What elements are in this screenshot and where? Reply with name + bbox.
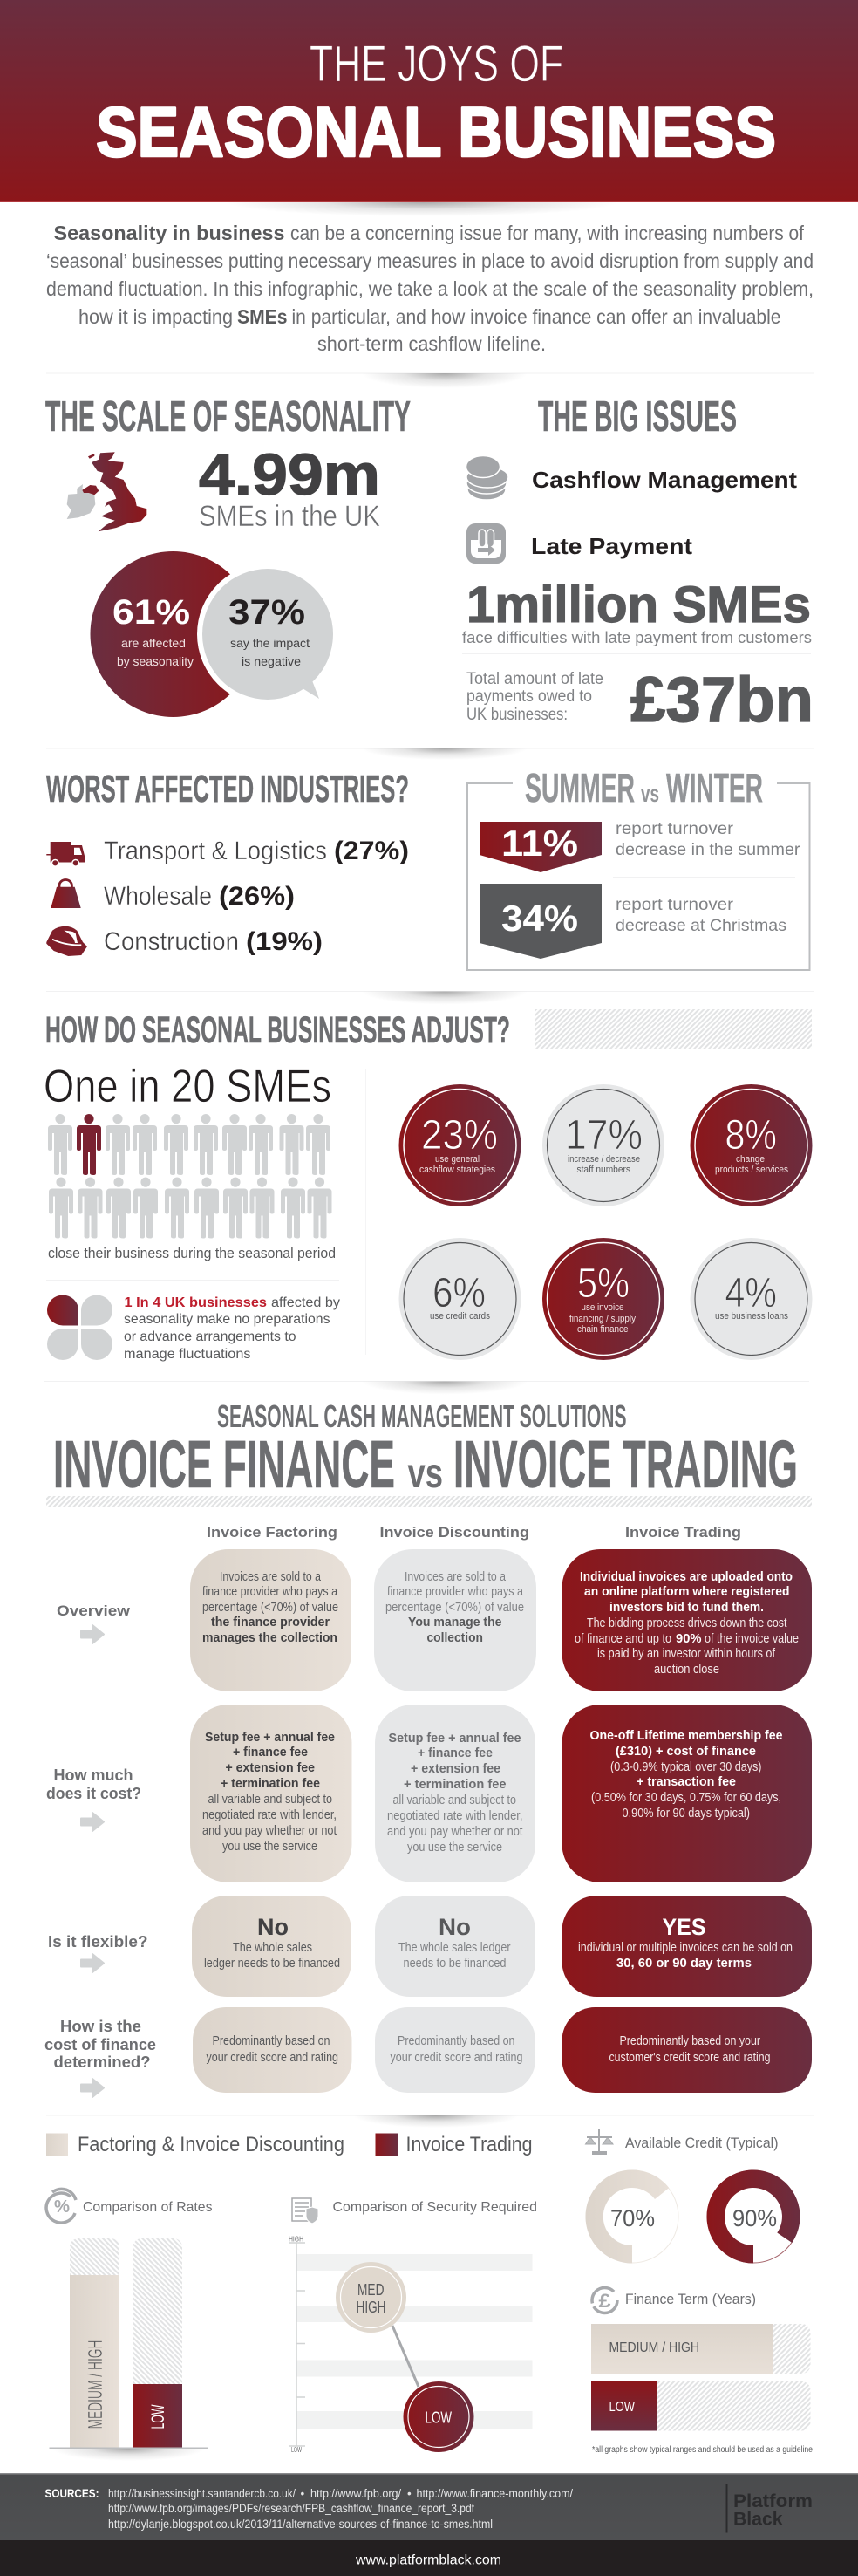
- text: one in four businesses: or advance arrangements to: [124, 1329, 296, 1344]
- stat circle: 5 percent: chain finance: [577, 1324, 628, 1335]
- text: total amount owed: [466, 670, 603, 724]
- card: factoring cost: [190, 1705, 352, 1882]
- text: summer turnover: report turnover: [616, 820, 734, 838]
- card: trading overview: is paid by an investor within hours of: [597, 1647, 776, 1661]
- chart: 90 percent donut: 90%: [732, 2205, 777, 2231]
- sources links: http://businessinsight.santandercb.co.uk/: [108, 2487, 296, 2500]
- stat: 37bn: £37bn: [630, 665, 814, 735]
- text: one in four businesses: seasonality make no preparations: [124, 1312, 330, 1327]
- stat label: late payment difficulties: face difficulties with late payment from customers: [462, 628, 812, 646]
- card: trading cost: (0.3-0.9% typical over 30 days): [610, 1760, 762, 1774]
- chart: overlapping circles: by seasonality: [117, 654, 194, 668]
- item: wholesale: Wholesale: [104, 882, 212, 911]
- intro paragraph: short-term cashflow lifeline.: [317, 332, 546, 355]
- card: factoring cost: + termination fee: [221, 1777, 320, 1791]
- stat circle: 8 percent: change: [736, 1154, 765, 1165]
- card: discounting overview: [374, 1549, 536, 1691]
- bar: low: [591, 2381, 811, 2430]
- chart: overlapping circles: is negative: [242, 654, 301, 668]
- card: trading overview: 90%: [676, 1632, 702, 1646]
- chart: 90 percent donut: [707, 2170, 800, 2263]
- title line two: SEASONAL BUSINESS: [96, 93, 776, 172]
- chart: 70 percent donut: [586, 2170, 678, 2263]
- logo: platform black: Black: [733, 2509, 783, 2530]
- chart: rates bars: MEDIUM / HIGH: [84, 2340, 106, 2429]
- row label: is it flexible: [48, 1933, 148, 1972]
- sources label: SOURCES:: [45, 2487, 99, 2500]
- card: discounting cost: + extension fee: [411, 1762, 500, 1776]
- icon: bag: [51, 879, 81, 908]
- text: total amount owed: Total amount of late: [466, 670, 603, 688]
- stat circle: 8 percent: [691, 1084, 813, 1206]
- stat circle: 5 percent: use invoice: [581, 1302, 624, 1313]
- issue: cashflow management: Cashflow Management: [532, 467, 797, 493]
- card: trading overview: investors bid to fund them.: [609, 1601, 764, 1615]
- card: factoring flexibility: The whole sales: [233, 1941, 312, 1955]
- sources links: •: [407, 2487, 412, 2500]
- icon: late payment: [466, 523, 506, 564]
- legend: Invoice Trading: [406, 2133, 532, 2156]
- heading: how do seasonal businesses adjust: HOW DO SEASONAL BUSINESSES ADJUST?: [45, 1009, 510, 1051]
- panel: the big issues: [462, 393, 814, 735]
- footer: website: www.platformblack.com: [355, 2552, 501, 2568]
- sources links: http://www.finance-monthly.com/: [417, 2487, 573, 2500]
- logo: platform black: [725, 2484, 813, 2533]
- card: factoring overview: manages the collection: [202, 1631, 337, 1645]
- chart: overlapping circles: [91, 551, 338, 717]
- panel: available credit: [586, 2129, 800, 2263]
- card: trading determination: Predominantly based on your: [619, 2034, 760, 2048]
- heading: comparison of rates: Comparison of Rates: [83, 2200, 213, 2215]
- card: discounting cost: + finance fee: [418, 1746, 493, 1760]
- card: discounting overview: percentage (<70%) of value: [385, 1601, 524, 1615]
- card: discounting overview: Invoices are sold to a: [405, 1570, 507, 1584]
- card: discounting flexibility: needs to be financed: [403, 1957, 506, 1971]
- card: trading determination: [562, 2007, 812, 2093]
- row label: how is the cost of finance determined: [44, 2018, 156, 2097]
- chart: rates bars: LOW: [148, 2404, 168, 2429]
- text: total amount owed: UK businesses:: [466, 706, 568, 724]
- card: trading overview: of finance and up to: [575, 1632, 671, 1646]
- card: factoring cost: + extension fee: [225, 1761, 315, 1775]
- stat circle: 23 percent: 23%: [421, 1112, 498, 1158]
- text: one in four businesses: manage fluctuations: [124, 1347, 251, 1362]
- card: factoring determination: [193, 2007, 352, 2093]
- stat circle: 4 percent: use business loans: [715, 1311, 788, 1322]
- badge: 34 percent: 34%: [501, 898, 578, 939]
- intro paragraph: [46, 222, 814, 355]
- icon: hard hat: [46, 926, 87, 956]
- stat circle: 17 percent: [542, 1084, 664, 1206]
- icon: truck: [46, 842, 85, 866]
- heading: summer vs winter: vs: [641, 780, 659, 807]
- card: discounting determination: your credit score and rating: [391, 2051, 523, 2065]
- card: discounting determination: [375, 2007, 535, 2093]
- card: discounting flexibility: [375, 1896, 535, 1997]
- row label: how much does it cost: How much: [54, 1766, 133, 1784]
- card: trading overview: Individual invoices are uploaded onto: [580, 1570, 793, 1584]
- icon: pound: [592, 2287, 617, 2313]
- row label: how much does it cost: does it cost?: [46, 1785, 141, 1802]
- text: winter turnover: [616, 896, 786, 935]
- card: factoring determination: your credit score and rating: [206, 2051, 338, 2065]
- item: construction: Construction: [104, 927, 239, 956]
- icon: pound: £: [598, 2290, 611, 2312]
- heading block: invoice finance vs invoice trading: [46, 1398, 812, 1507]
- card: trading cost: [562, 1705, 812, 1882]
- card: factoring flexibility: [192, 1896, 351, 1997]
- card: factoring overview: the finance provider: [211, 1616, 330, 1630]
- text: one in four businesses: [124, 1295, 340, 1362]
- card: discounting flexibility: No: [439, 1914, 471, 1940]
- badge: 11 percent: 11%: [501, 823, 578, 864]
- chart: security: MED: [358, 2281, 384, 2299]
- heading: comparison of security required: Comparison of Security Required: [333, 2200, 537, 2215]
- card: trading flexibility: 30, 60 or 90 day terms: [616, 1957, 752, 1971]
- panel: comparison of security: [289, 2198, 537, 2454]
- issue: late payment: Late Payment: [531, 533, 692, 559]
- panel: comparison of rates: [46, 2189, 212, 2461]
- chart: security: LOW: [291, 2446, 302, 2454]
- stat circle: 6 percent: [399, 1238, 521, 1360]
- card: trading overview: an online platform where registered: [584, 1585, 790, 1599]
- card: trading flexibility: [562, 1896, 812, 1997]
- row label: how is the cost of finance determined: determined?: [54, 2053, 150, 2071]
- header banner: [0, 0, 858, 216]
- item: construction: (19%): [246, 927, 323, 956]
- column headers: Invoice Discounting: [380, 1524, 529, 1541]
- card: trading cost: (£310) + cost of finance: [616, 1745, 756, 1759]
- card: trading cost: One-off Lifetime membership fee: [589, 1729, 783, 1743]
- footer: website: [0, 2540, 858, 2576]
- text: close their business: close their business during the seasonal period: [48, 1245, 336, 1261]
- bar: low: LOW: [609, 2400, 636, 2415]
- stat: one in 20 SMEs: One in 20 SMEs: [44, 1061, 331, 1112]
- stat circle: 4 percent: [691, 1238, 813, 1360]
- chart: security: HIGH: [356, 2299, 385, 2316]
- heading: vs: vs: [408, 1451, 443, 1497]
- item: transport and logistics: (27%): [334, 837, 409, 865]
- card: factoring cost: negotiated rate with lender,: [202, 1808, 337, 1822]
- chart: overlapping circles: say the impact: [230, 636, 310, 650]
- intro paragraph: SMEs: [237, 305, 288, 328]
- bar: medium high: [591, 2324, 811, 2374]
- chart: security: HIGH: [289, 2235, 303, 2244]
- stat circle: 23 percent: cashflow strategies: [419, 1165, 495, 1175]
- card: discounting cost: Setup fee + annual fee: [389, 1732, 521, 1746]
- stat circle: 17 percent: increase / decrease: [568, 1154, 640, 1165]
- column headers: [207, 1524, 741, 1541]
- stat circle: 5 percent: financing / supply: [569, 1314, 636, 1324]
- card: factoring flexibility: ledger needs to be financed: [204, 1957, 340, 1971]
- stat: 1 million SMEs: 1million SMEs: [466, 577, 811, 633]
- stat circle: 17 percent: 17%: [565, 1112, 643, 1158]
- card: factoring overview: finance provider who pays a: [202, 1585, 338, 1599]
- sources links: http://www.fpb.org/images/PDFs/research/FPB_cashflow_finance_report_3.pdf: [108, 2502, 474, 2515]
- stat circle: 23 percent: [399, 1084, 521, 1206]
- logo: platform black: Platform: [733, 2491, 813, 2511]
- heading: worst affected industries: WORST AFFECTED INDUSTRIES?: [46, 768, 409, 810]
- panel: how do seasonal businesses adjust: [44, 1009, 813, 1362]
- card: trading determination: customer's credit score and rating: [609, 2051, 771, 2065]
- card: factoring determination: Predominantly based on: [213, 2034, 330, 2048]
- card: discounting cost: [375, 1705, 535, 1882]
- icon: document and shield: [292, 2198, 318, 2224]
- row label: overview: [57, 1602, 131, 1643]
- card: factoring cost: Setup fee + annual fee: [205, 1731, 335, 1745]
- chart: overlapping circles: are affected: [121, 636, 186, 650]
- panel: the scale of seasonality: [45, 393, 411, 717]
- bar: medium high: MEDIUM / HIGH: [609, 2340, 699, 2355]
- icon: scales: [586, 2129, 613, 2153]
- intro paragraph: how it is impacting: [78, 305, 233, 328]
- card: factoring flexibility: No: [257, 1914, 289, 1940]
- card: discounting cost: negotiated rate with lender,: [387, 1809, 523, 1823]
- row label: is it flexible: Is it flexible?: [48, 1933, 148, 1951]
- card: trading flexibility: individual or multiple invoices can be sold on: [578, 1941, 793, 1955]
- chart: security: LOW: [426, 2409, 452, 2427]
- item: construction: [104, 927, 323, 956]
- card: trading overview: [562, 1549, 812, 1691]
- heading: finance term: Finance Term (Years): [625, 2291, 756, 2307]
- card: trading cost: (0.50% for 30 days, 0.75% for 60 days,: [591, 1791, 781, 1805]
- card: discounting determination: Predominantly based on: [398, 2034, 514, 2048]
- icon: clover one in four: [47, 1295, 112, 1360]
- panel: worst affected industries: [46, 768, 409, 956]
- intro paragraph: Seasonality in business: [54, 222, 284, 244]
- card: trading overview: The bidding process drives down the cost: [587, 1616, 786, 1630]
- stat circle: 5 percent: 5%: [577, 1261, 630, 1307]
- panel: summer vs winter: [467, 765, 809, 970]
- text: winter turnover: report turnover: [616, 896, 734, 914]
- stat label: SMEs in the UK: SMEs in the UK: [199, 500, 380, 533]
- pictogram: people: [48, 1114, 331, 1239]
- footer: sources: [0, 2473, 858, 2540]
- row label: how is the cost of finance determined: cost of finance: [44, 2036, 156, 2053]
- stat circle: 8 percent: 8%: [725, 1112, 777, 1158]
- card: discounting cost: and you pay whether or not: [387, 1825, 523, 1839]
- icon: percent: %: [54, 2197, 70, 2217]
- stat circle: 8 percent: products / services: [715, 1165, 788, 1175]
- card: factoring cost: and you pay whether or not: [202, 1824, 337, 1838]
- icon: percent: [46, 2189, 76, 2223]
- chart: 70 percent donut: 70%: [610, 2205, 655, 2231]
- item: wholesale: (26%): [219, 882, 295, 911]
- card: trading overview: of the invoice value: [705, 1632, 799, 1646]
- stat circle: 6 percent: 6%: [432, 1270, 486, 1316]
- panel: finance term: [591, 2287, 813, 2455]
- row label: how much does it cost: [46, 1766, 141, 1831]
- chart: overlapping circles: 37%: [228, 593, 305, 632]
- card: factoring cost: all variable and subject to: [208, 1793, 332, 1807]
- heading: available credit: Available Credit (Typical): [625, 2135, 778, 2151]
- stat circle: 23 percent: use general: [435, 1154, 480, 1165]
- heading: scale of seasonality: THE SCALE OF SEASONALITY: [45, 393, 411, 441]
- chart: security: [289, 2235, 532, 2454]
- row label: how is the cost of finance determined: How is the: [60, 2018, 141, 2035]
- text: one in four businesses: affected by: [271, 1295, 340, 1310]
- card: discounting overview: You manage the: [408, 1616, 502, 1630]
- sources links: http://dylanje.blogspot.co.uk/2013/11/alternative-sources-of-finance-to-smes.html: [108, 2518, 493, 2531]
- legend: Factoring & Invoice Discounting: [78, 2133, 344, 2156]
- footnote: *all graphs show typical ranges and should be used as a guideline: [592, 2445, 813, 2455]
- text: one in four businesses: 1 In 4 UK businesses: [124, 1295, 267, 1310]
- item: transport and logistics: Transport & Logistics: [104, 837, 327, 865]
- sources links: •: [300, 2487, 305, 2500]
- column headers: Invoice Factoring: [207, 1524, 337, 1541]
- heading: summer vs winter: SUMMER: [525, 765, 635, 810]
- stat circle: 17 percent: staff numbers: [577, 1165, 630, 1175]
- comparison table: [44, 1524, 812, 2097]
- stat circle: 5 percent: [542, 1238, 664, 1360]
- text: winter turnover: decrease at Christmas: [616, 917, 786, 935]
- card: factoring overview: Invoices are sold to a: [220, 1570, 322, 1584]
- row label: overview: Overview: [57, 1602, 131, 1619]
- legend: [46, 2133, 532, 2156]
- stat circle: 6 percent: use credit cards: [430, 1311, 490, 1322]
- chart: overlapping circles: 61%: [112, 593, 190, 632]
- stat: 4.99m: 4.99m: [199, 442, 380, 508]
- card: trading cost: + transaction fee: [637, 1775, 736, 1789]
- card: factoring cost: you use the service: [222, 1840, 317, 1854]
- sources links: [108, 2487, 573, 2531]
- text: total amount owed: payments owed to: [466, 687, 592, 706]
- stat circle: 4 percent: 4%: [725, 1270, 777, 1316]
- title line one: THE JOYS OF: [310, 36, 563, 92]
- card: discounting overview: finance provider who pays a: [387, 1585, 524, 1599]
- card: trading overview: auction close: [654, 1663, 719, 1677]
- card: factoring cost: + finance fee: [233, 1746, 308, 1759]
- text: summer turnover: [616, 820, 800, 859]
- card: discounting cost: + termination fee: [404, 1778, 506, 1792]
- card: discounting flexibility: The whole sales ledger: [398, 1941, 511, 1955]
- card: factoring overview: percentage (<70%) of value: [202, 1601, 338, 1615]
- card: discounting cost: you use the service: [407, 1841, 502, 1855]
- card: discounting overview: collection: [427, 1631, 483, 1645]
- chart: rates bars: [49, 2238, 208, 2461]
- sources links: http://www.fpb.org/: [310, 2487, 401, 2500]
- badge: 11 percent: [480, 822, 602, 872]
- heading: invoice finance: INVOICE FINANCE: [53, 1427, 395, 1502]
- intro paragraph: can be a concerning issue for many, with increasing numbers of: [290, 222, 804, 244]
- badge: 34 percent: [480, 884, 602, 959]
- card: factoring overview: [190, 1549, 351, 1691]
- card: trading flexibility: YES: [663, 1914, 706, 1940]
- text: summer turnover: decrease in the summer: [616, 841, 800, 859]
- item: wholesale: [104, 882, 295, 911]
- icon: coins: [466, 455, 508, 500]
- card: trading cost: 0.90% for 90 days typical): [623, 1807, 750, 1821]
- heading: summer vs winter: WINTER: [666, 765, 763, 810]
- card: discounting cost: all variable and subject to: [392, 1794, 516, 1807]
- icon: UK map: [67, 452, 146, 531]
- column headers: Invoice Trading: [625, 1524, 741, 1541]
- intro paragraph: in particular, and how invoice finance can offer an invaluable: [291, 305, 781, 328]
